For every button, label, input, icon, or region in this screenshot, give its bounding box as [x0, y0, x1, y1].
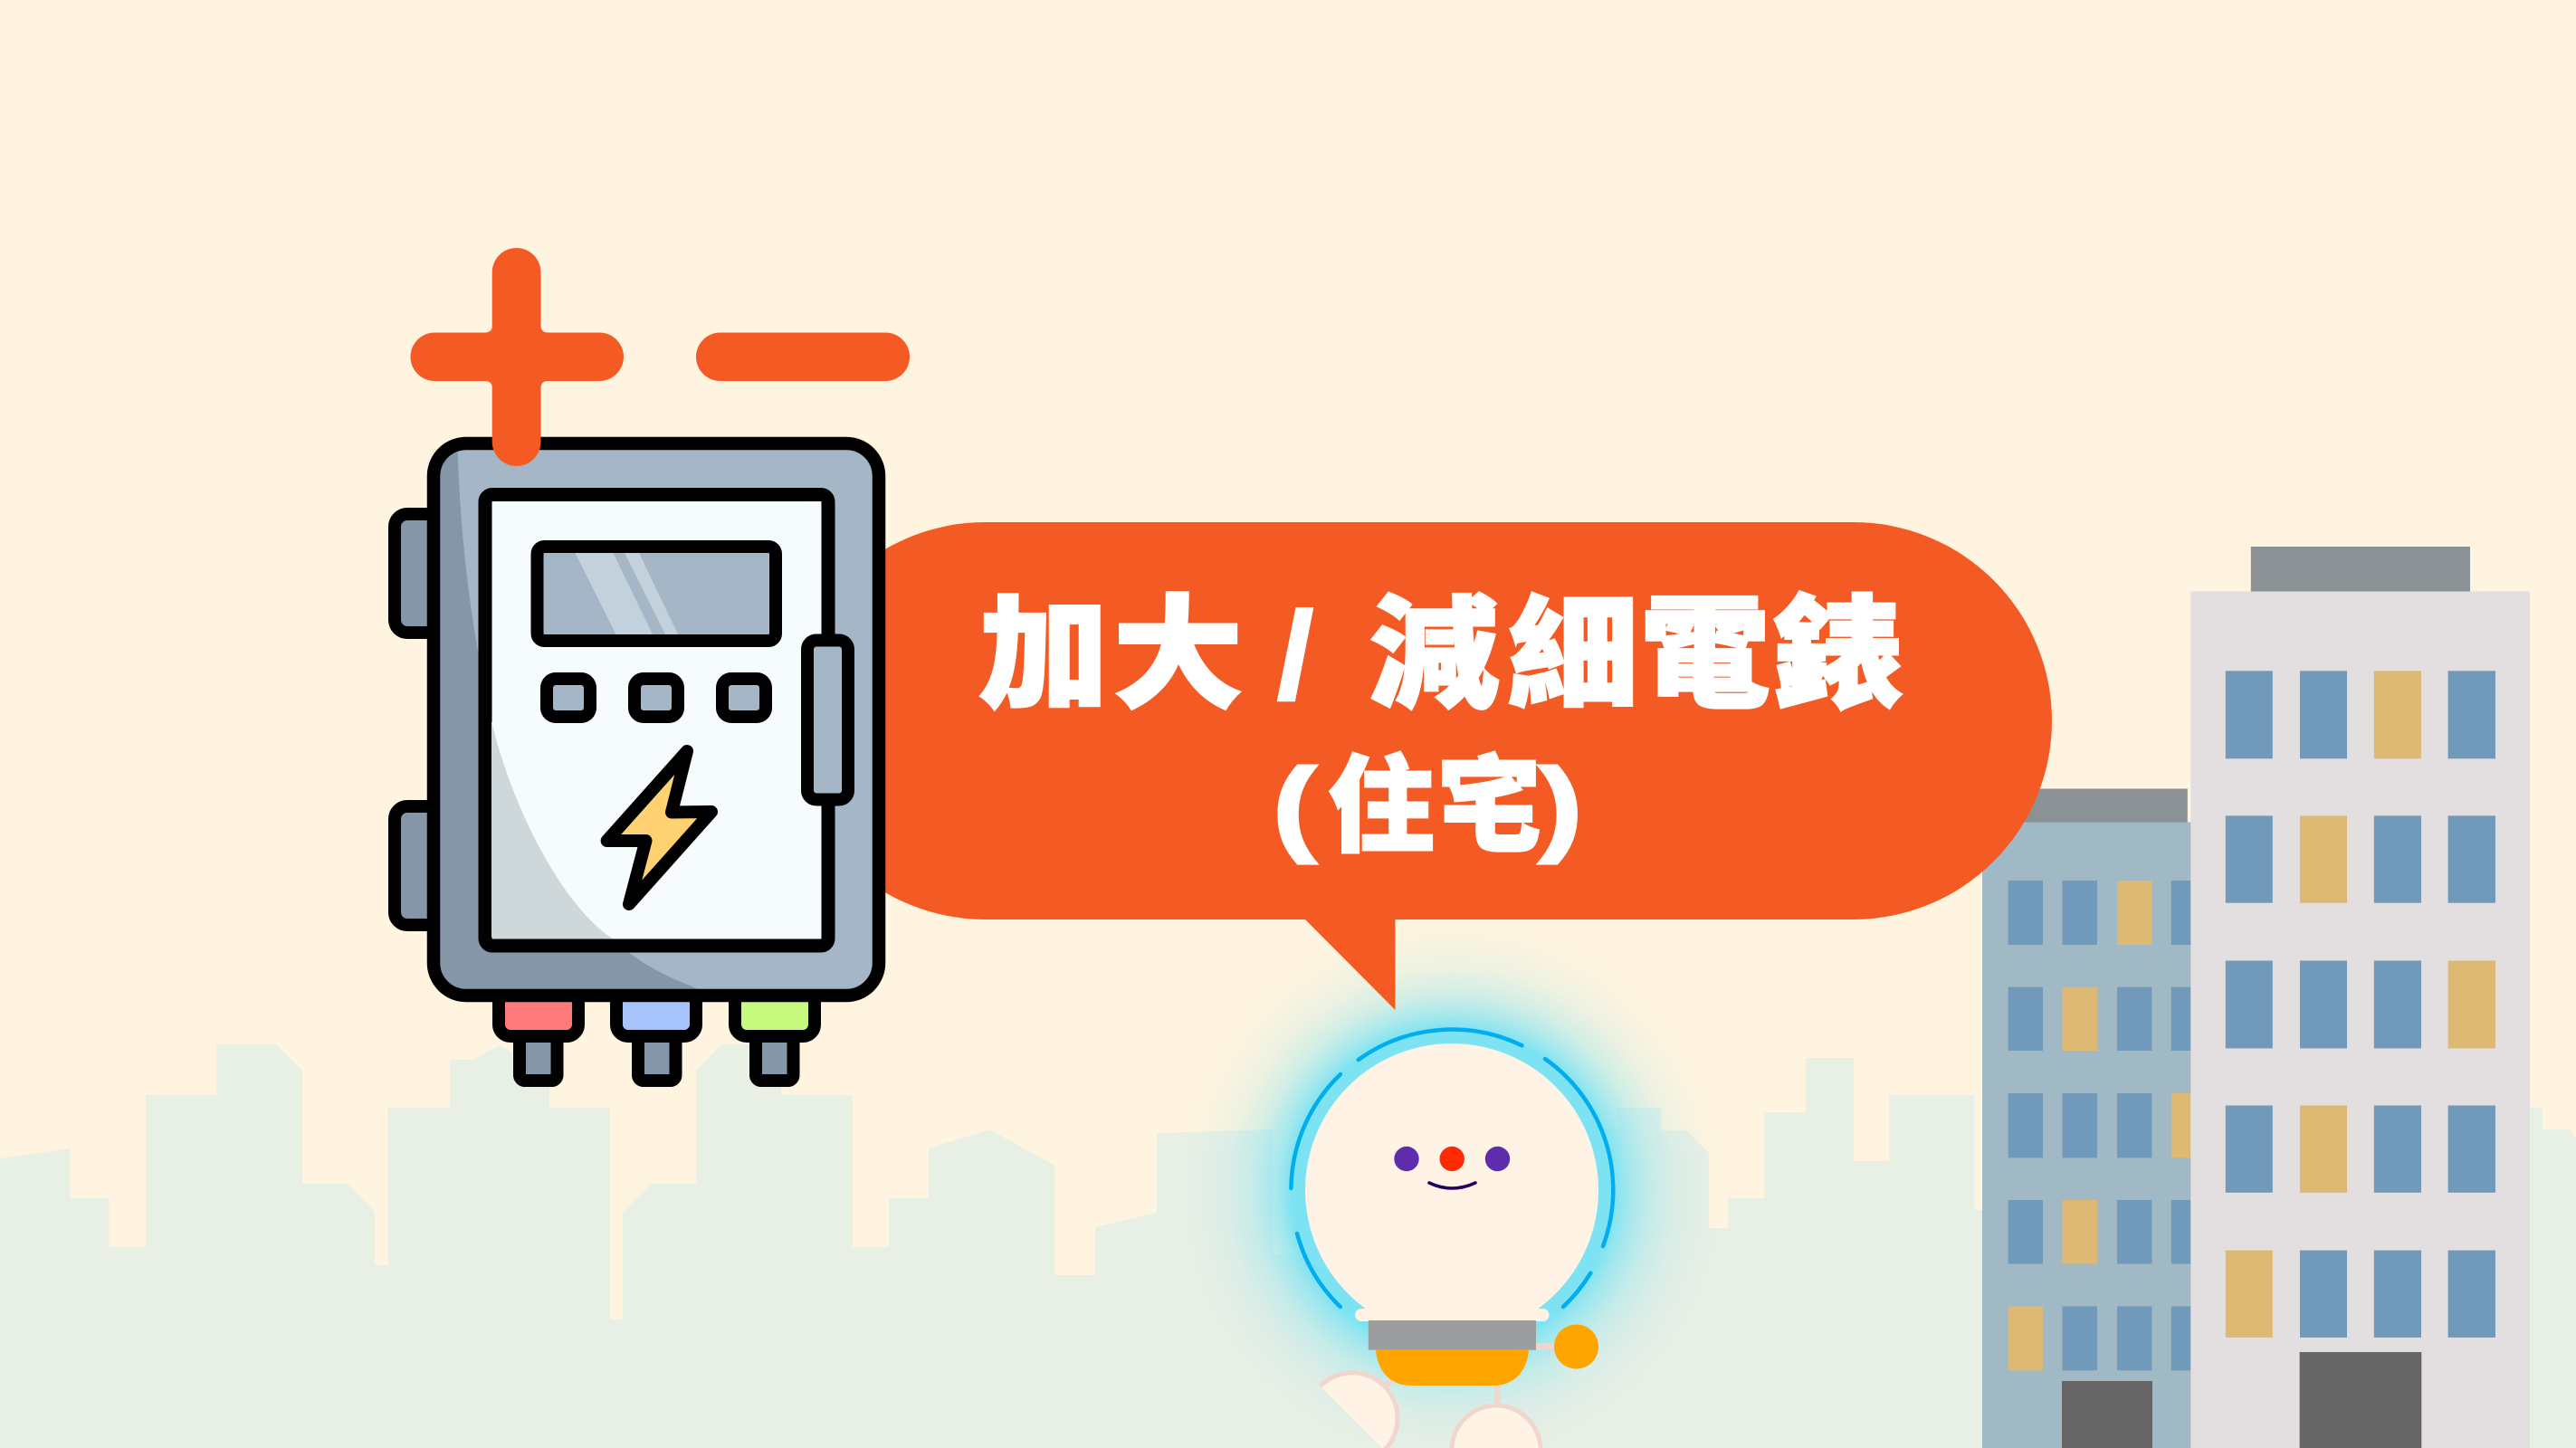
subtitle text: ( [1273, 747, 1317, 864]
bottom connectors [499, 991, 815, 1081]
grey collar [1369, 1320, 1536, 1350]
building: back blue tower [1982, 789, 2191, 1448]
door handle [807, 641, 848, 800]
meter body [434, 443, 879, 996]
speech bubble with tail [787, 522, 2052, 1010]
subtitle text: 住宅 [1329, 748, 1541, 865]
bulb head [1305, 1043, 1598, 1337]
door panel [485, 494, 828, 946]
title text: 加大/減細電錶 [978, 586, 1903, 724]
icon: plus sign [411, 248, 624, 466]
glow behind mascot [1185, 923, 1719, 1448]
display screen [538, 547, 776, 641]
icon: minus sign [696, 333, 910, 381]
icon: electricity meter [395, 434, 879, 1081]
face [1394, 1147, 1510, 1188]
dashed halo ring [1291, 1030, 1613, 1307]
lightning bolt [607, 751, 711, 904]
mascot: light bulb character [1291, 1030, 1613, 1448]
city skyline silhouette [0, 1044, 2576, 1448]
left tabs [395, 514, 440, 925]
subtitle text [1273, 747, 1582, 865]
orange body [1376, 1350, 1529, 1386]
subtitle text: ) [1539, 747, 1582, 864]
buttons [547, 679, 766, 717]
arm and hand [1534, 1325, 1598, 1368]
left leg and foot [1321, 1373, 1398, 1448]
building: front grey tower [2190, 547, 2530, 1448]
right leg and foot [1452, 1380, 1541, 1448]
